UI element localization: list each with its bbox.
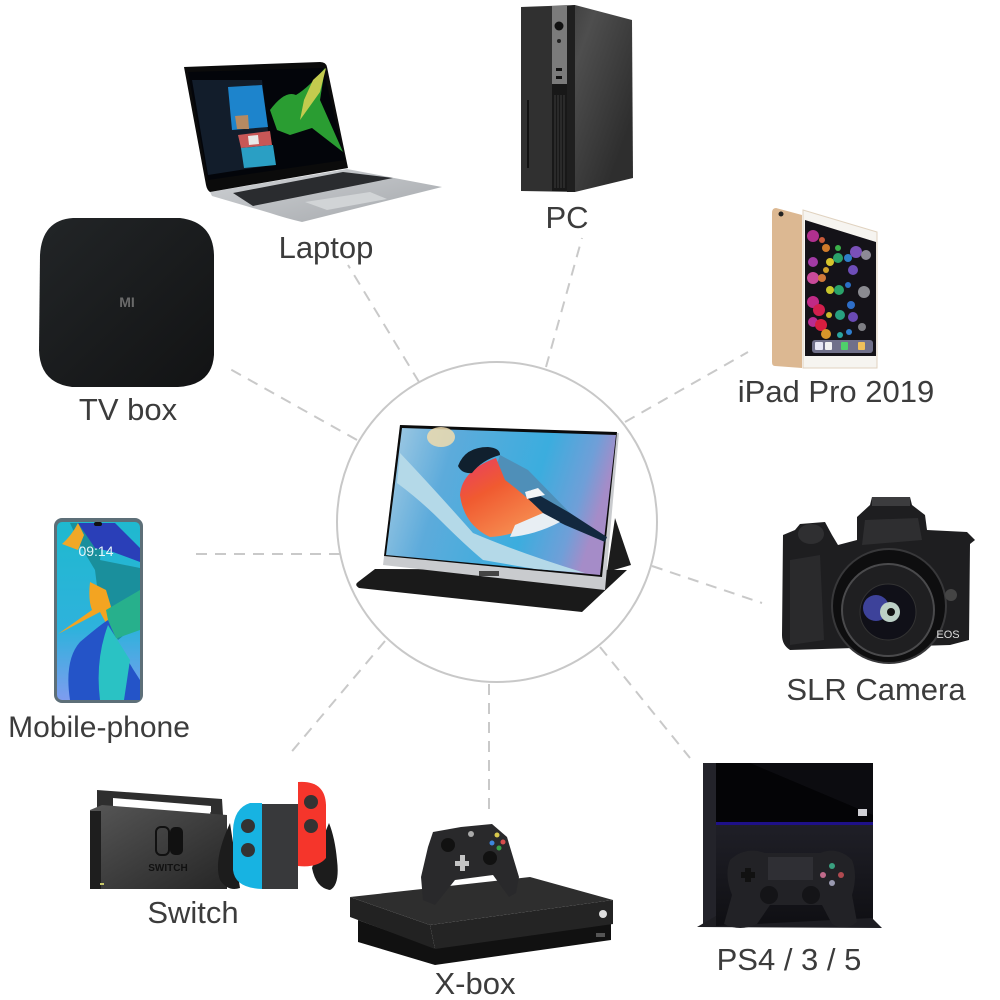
iPad dock — [812, 340, 873, 353]
laptop — [184, 62, 442, 222]
label: TV box: TV box — [79, 392, 178, 427]
label: PS4 / 3 / 5: PS4 / 3 / 5 — [717, 942, 861, 977]
left joy-con — [233, 803, 262, 889]
label: iPad Pro 2019: iPad Pro 2019 — [738, 374, 934, 409]
camera button — [945, 589, 957, 601]
dock handle — [97, 790, 223, 815]
right joy-con — [298, 782, 326, 866]
label: PC: PC — [545, 200, 589, 235]
PS4 console and controller — [697, 763, 882, 928]
label: X-box: X-box — [435, 966, 516, 1000]
controller — [724, 851, 857, 928]
dashed connector lines — [188, 238, 762, 810]
console left face — [350, 897, 435, 949]
label: Switch: Switch — [147, 895, 239, 930]
console top — [350, 877, 613, 925]
console lower tier — [358, 920, 611, 965]
laptop base — [210, 169, 442, 222]
phone notch — [94, 522, 102, 526]
camera EOS mark: EOS — [936, 629, 960, 641]
PS logo — [858, 809, 867, 816]
monitor stand cover — [356, 569, 627, 612]
Xbox controller — [421, 824, 519, 905]
Xbox console and controller — [350, 824, 613, 965]
mobile phone: 09:14 — [78, 543, 114, 559]
TV box logo: MI — [119, 294, 135, 310]
monitor back flap — [607, 518, 631, 572]
label: Mobile-phone: Mobile-phone — [8, 711, 190, 744]
monitor screen with bird — [386, 427, 616, 575]
laptop screen — [184, 62, 348, 192]
central portable monitor — [356, 425, 631, 612]
central circle — [337, 362, 657, 682]
PC front panel — [521, 7, 552, 191]
Nintendo Switch: SWITCH — [148, 863, 188, 874]
SLR camera — [782, 497, 975, 663]
Nintendo Switch — [90, 782, 338, 890]
TV box — [39, 218, 214, 387]
Switch logo — [156, 827, 169, 855]
monitor logo strip — [479, 571, 499, 576]
console front face — [430, 900, 613, 949]
dock body — [90, 805, 227, 889]
grips — [218, 823, 338, 890]
iPad screen — [805, 220, 876, 356]
camera lens — [832, 549, 946, 663]
monitor frame — [383, 425, 619, 590]
switch tablet — [262, 804, 298, 889]
label: Laptop: Laptop — [279, 230, 373, 265]
mobile phone — [54, 518, 143, 703]
label: SLR Camera: SLR Camera — [786, 672, 966, 707]
PC tower — [521, 5, 633, 192]
iPad — [772, 208, 877, 368]
